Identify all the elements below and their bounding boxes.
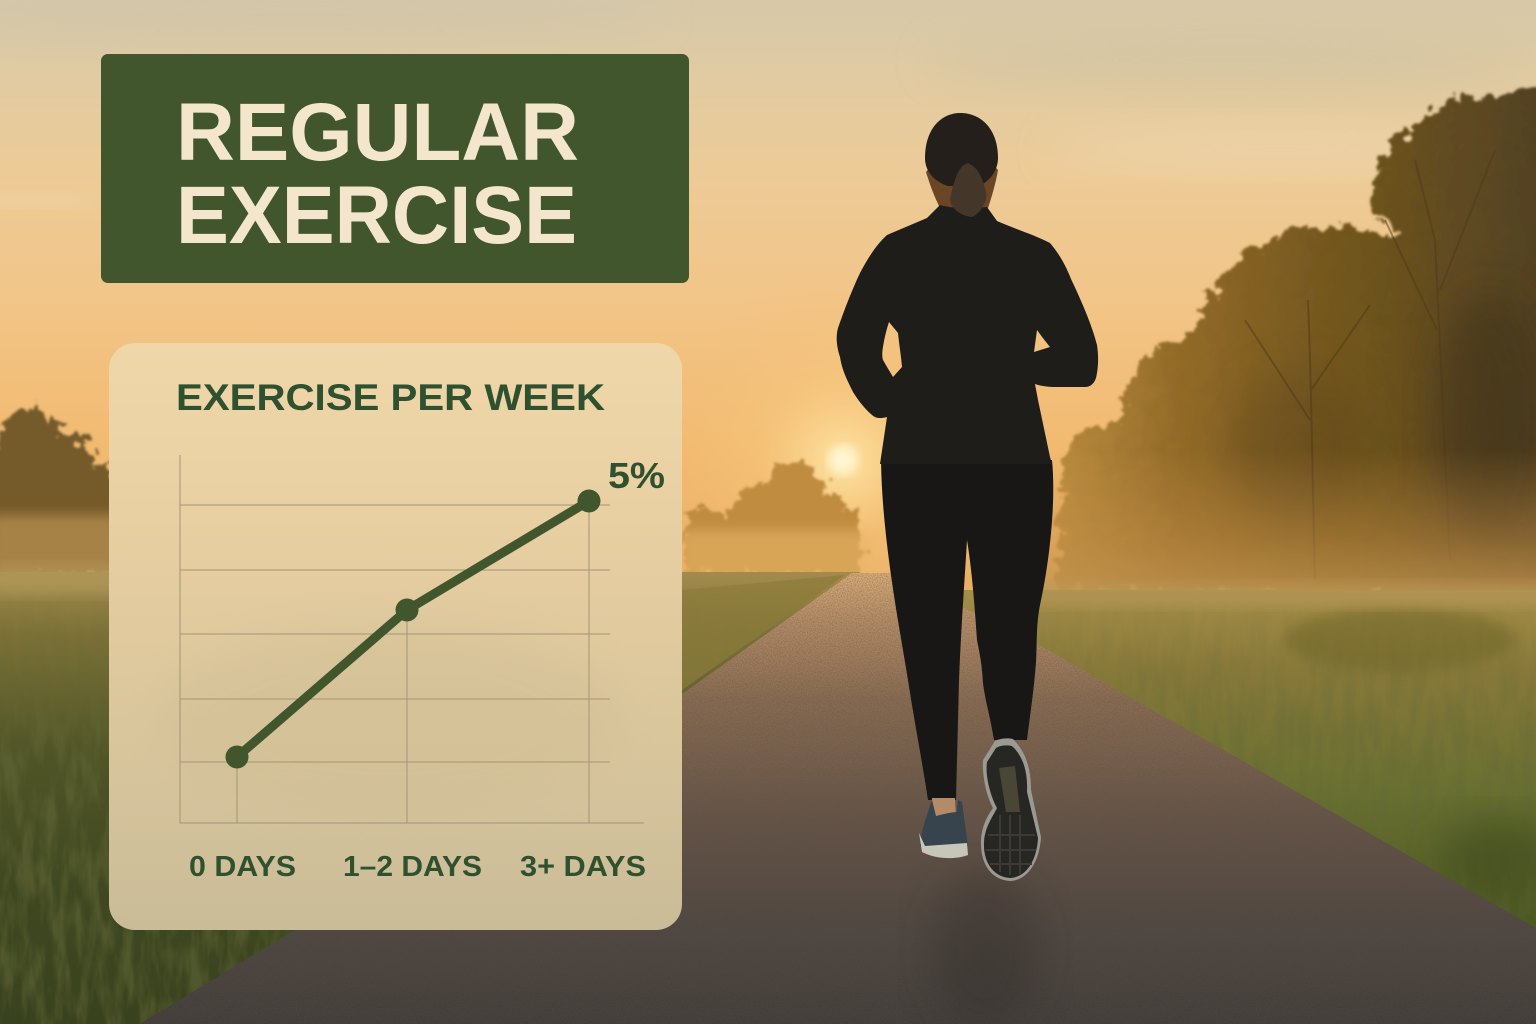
chart heading: EXERCISE PER WEEK xyxy=(176,377,605,418)
left shoe xyxy=(919,800,968,858)
title text: EXERCISE xyxy=(176,170,577,261)
axis labels: 1–2 DAYS xyxy=(343,851,482,883)
trees: right treeline xyxy=(1040,92,1536,600)
axis labels xyxy=(189,851,646,883)
ankle xyxy=(932,798,956,820)
line chart xyxy=(180,455,644,823)
ponytail xyxy=(950,163,986,217)
background: sunrise sky xyxy=(0,0,1536,600)
meadow: right xyxy=(962,585,1536,928)
chart panel xyxy=(109,343,682,930)
jacket xyxy=(837,205,1098,464)
neck and ears xyxy=(926,155,998,208)
right shoe sole xyxy=(981,738,1041,881)
meadow: left xyxy=(0,565,860,1024)
hair xyxy=(925,113,998,186)
title banner xyxy=(101,54,689,283)
data label: 5%: 5% xyxy=(608,455,665,496)
trees: left edge xyxy=(0,408,120,580)
title text xyxy=(176,87,579,261)
axis labels: 0 DAYS xyxy=(189,851,296,883)
runner silhouette xyxy=(837,113,1098,881)
distant trees: centre horizon xyxy=(680,462,870,580)
running path xyxy=(140,573,1536,1024)
leggings xyxy=(881,460,1053,800)
axis labels: 3+ DAYS xyxy=(520,851,646,883)
sun glow xyxy=(640,270,1050,610)
title text: REGULAR xyxy=(176,87,579,178)
